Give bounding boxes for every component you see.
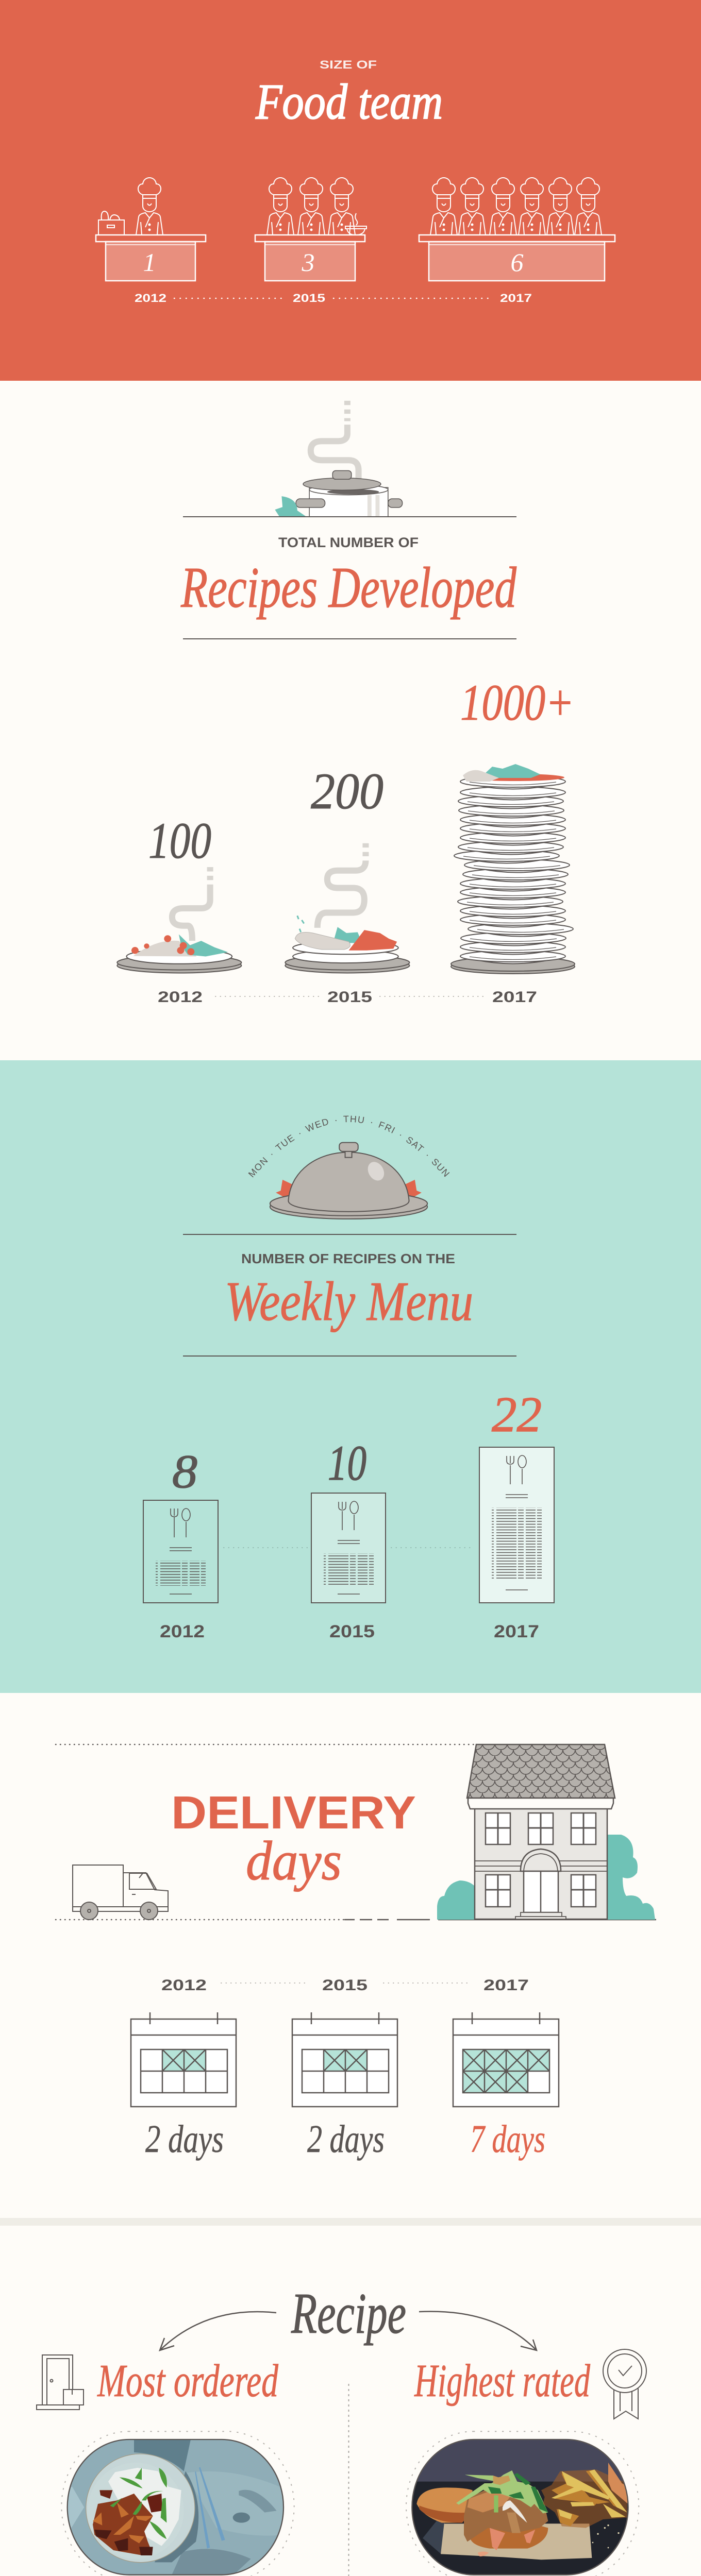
timeline: 2017 [500, 292, 532, 304]
heading: highest rated: Highest rated [414, 2355, 591, 2406]
value 6: 6 [510, 248, 524, 277]
divider bottom [183, 1355, 516, 1357]
icon: chefs 2015 [267, 178, 355, 235]
arrow left [160, 2312, 276, 2350]
timeline: 2012 [135, 292, 166, 304]
counter 2015 [255, 235, 365, 281]
icon: rosette medal [603, 2349, 646, 2419]
calendar 2015 [292, 2012, 397, 2107]
value 200: 200 [311, 762, 383, 820]
divider bottom [183, 638, 516, 639]
menu card 2017 [479, 1447, 554, 1603]
timeline: 2012 [158, 989, 203, 1006]
value 1: 1 [143, 248, 156, 277]
timeline: 2012 [161, 1977, 207, 1994]
value 8: 8 [172, 1445, 197, 1498]
icon: delivery truck [73, 1865, 168, 1920]
title: delivery: DELIVERY [171, 1787, 416, 1839]
chart: 2017 team [419, 178, 615, 281]
icon: bushes [437, 1835, 655, 1920]
chart: 2012 team [96, 178, 206, 281]
panel: weekly menu [0, 1060, 701, 1693]
road dotted lines [56, 1744, 475, 1920]
title: recipes developed: Recipes Developed [180, 556, 517, 620]
title: recipe: Recipe [291, 2282, 406, 2346]
calendar 2017 [453, 2012, 559, 2107]
icon: soup bowl [345, 213, 366, 235]
icon: tall plate stack 2017 [451, 764, 575, 974]
icon: grocery bag [98, 211, 124, 235]
counter 2012 [96, 235, 206, 281]
timeline [160, 1622, 539, 1641]
timeline: 2015 [322, 1977, 368, 1994]
icon: door with parcel [37, 2355, 84, 2410]
heading: number of recipes on the: NUMBER OF RECIPES ON THE [241, 1251, 455, 1266]
timeline [158, 989, 537, 1006]
center dotted divider [348, 2384, 349, 2576]
panel: recipes developed [0, 381, 701, 1060]
value 3: 3 [301, 248, 314, 277]
title: food team: Food team [255, 74, 443, 130]
menu card 2015 [311, 1493, 386, 1603]
counter 2017 [419, 235, 615, 281]
title: days: days [246, 1831, 342, 1892]
icon: house [467, 1744, 615, 1919]
calendar 2012 [131, 2012, 236, 2107]
icon: two plates 2015 [285, 843, 409, 973]
arrow right [419, 2311, 537, 2350]
heading: total number of: TOTAL NUMBER OF [278, 535, 419, 550]
timeline: 2015 [329, 1622, 375, 1641]
icon: single plate 2012 [117, 867, 241, 973]
timeline [161, 1977, 529, 1994]
photo: chicken teriyaki [61, 2431, 294, 2576]
timeline: 2017 [492, 989, 537, 1006]
timeline [135, 292, 532, 304]
label: 2 days 2015: 2 days [307, 2117, 385, 2161]
photo: asian chicken burger [406, 2431, 639, 2576]
icon: chefs 2017 [430, 178, 602, 235]
panel: recipe most ordered and highest rated [36, 2294, 647, 2576]
chart: 2015 team [255, 178, 366, 281]
divider top [183, 516, 516, 517]
timeline: 2017 [494, 1622, 539, 1641]
icon: chef 2012 [136, 178, 163, 235]
value 22: 22 [492, 1387, 542, 1443]
panel: delivery days [0, 1693, 701, 2226]
value 100: 100 [148, 812, 211, 869]
menu card 2012 [143, 1500, 218, 1603]
icon: cloche [270, 1143, 427, 1219]
label: 2 days 2012: 2 days [145, 2117, 224, 2161]
heading: most ordered: Most ordered [97, 2355, 279, 2406]
value 1000+: 1000+ [460, 674, 574, 731]
heading: size of: SIZE OF [320, 58, 377, 71]
panel: food team [0, 0, 701, 381]
timeline: 2017 [483, 1977, 529, 1994]
icon: steaming pot [275, 401, 403, 517]
timeline: 2015 [293, 292, 325, 304]
text: days of the week arc: MON · TUE · WED · THU · FRI · SAT · SUN [248, 1116, 449, 1178]
timeline: 2012 [160, 1622, 205, 1641]
connector dots [224, 1547, 474, 1548]
label: 7 days 2017: 7 days [470, 2117, 545, 2161]
value 10: 10 [328, 1435, 366, 1490]
divider top [183, 1234, 516, 1235]
timeline: 2015 [327, 989, 372, 1006]
title: weekly menu: Weekly Menu [225, 1271, 473, 1332]
